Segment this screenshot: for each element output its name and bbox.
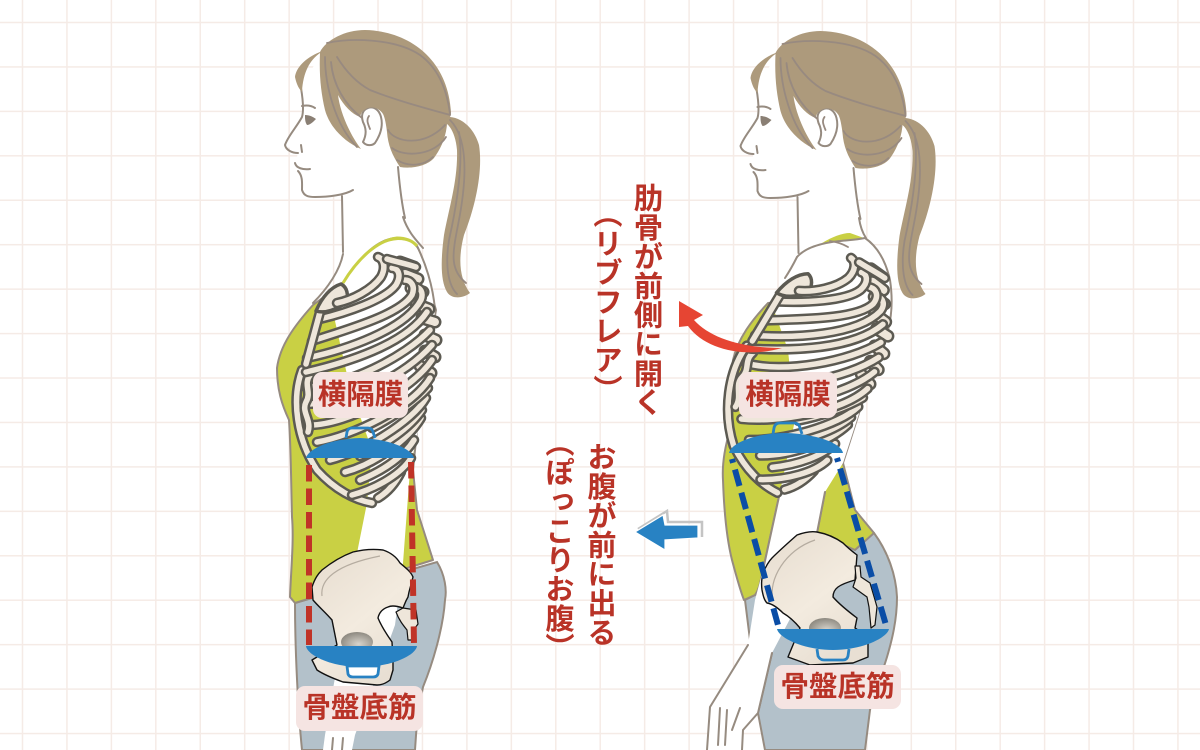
right blue dashed lines <box>732 458 886 625</box>
left diaphragm lid <box>306 428 414 458</box>
label: diaphragm right <box>739 372 837 418</box>
right ribcage <box>705 235 907 510</box>
left figure arm <box>323 240 435 750</box>
text: ribs open forward: 肋骨が前側に開く <box>630 183 662 417</box>
blue arrow <box>635 511 702 550</box>
left pelvic floor lid <box>306 646 417 677</box>
left figure head <box>285 30 480 297</box>
right figure strap <box>822 233 864 243</box>
left figure arm outline <box>417 246 435 310</box>
left figure neck back line <box>403 217 423 248</box>
right figure arm outlines <box>707 218 892 750</box>
right pelvis <box>762 532 877 665</box>
label: diaphragm left <box>313 372 408 418</box>
label: diaphragm right: 横隔膜 <box>745 379 831 411</box>
left figure hand lines <box>332 738 343 750</box>
text: pot belly: （ぽっこりお腹） <box>541 428 573 662</box>
right figure green top <box>723 300 874 600</box>
label: diaphragm left: 横隔膜 <box>318 379 403 411</box>
text: rib flare: （リブフレア） <box>589 199 621 403</box>
left figure strap <box>343 238 417 283</box>
label: pelvic floor left <box>296 686 423 731</box>
left red dashed lines <box>309 462 414 645</box>
right pelvic floor lid <box>777 629 889 660</box>
label: pelvic floor left: 骨盤底筋 <box>302 692 416 724</box>
text: belly protrudes: お腹が前に出る <box>583 442 615 646</box>
figure: right, rib flare posture <box>679 31 936 750</box>
right figure arm <box>707 238 892 750</box>
figure: left, correct posture <box>277 30 480 750</box>
red arrow <box>679 301 782 352</box>
label: pelvic floor right: 骨盤底筋 <box>780 671 894 703</box>
left figure neck to chest line <box>313 254 343 303</box>
right figure trousers <box>745 533 897 750</box>
label: pelvic floor right <box>774 665 901 709</box>
left ribcage <box>297 257 436 503</box>
right diaphragm lid <box>729 423 843 453</box>
left pelvis <box>312 549 418 685</box>
left figure green top <box>277 238 436 603</box>
right figure head <box>740 31 936 298</box>
left figure trousers <box>295 562 446 750</box>
